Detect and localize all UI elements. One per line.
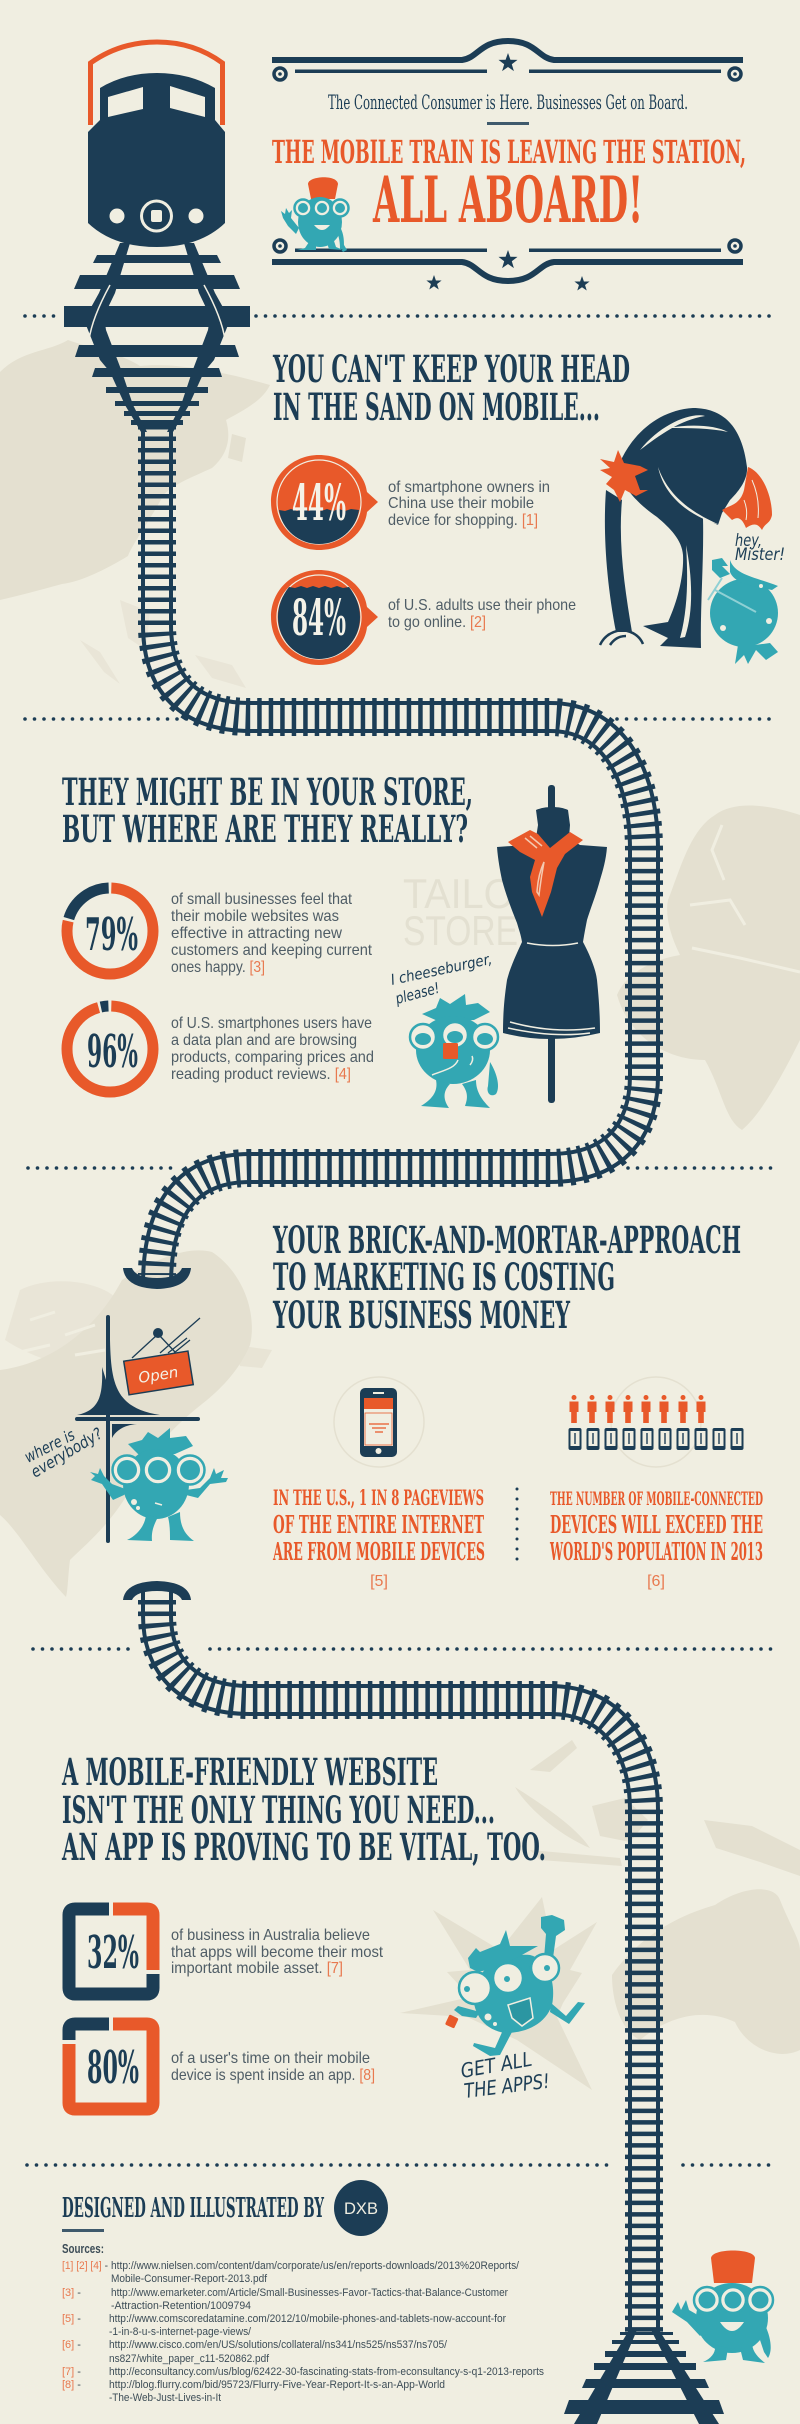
reference: 6: [6] (647, 1573, 665, 1590)
stat text: 96%: products, comparing prices and (171, 1049, 374, 1066)
stat text: 84% (388, 597, 576, 631)
speech note: where is everybody: where is (21, 1425, 78, 1467)
header frame: bottom (272, 240, 743, 290)
sources list: http://www.nielsen.com/content/dam/corporate/us/en/reports-downloads/2013%20Reports/ (111, 2260, 520, 2272)
stat text: 79%: ones happy. [3] (171, 959, 265, 976)
stat text: 44%: device for shopping. [1] (388, 512, 538, 529)
ostrich tail feathers (722, 467, 772, 530)
sources heading: Sources: (62, 2241, 104, 2256)
section three heading: YOUR BUSINESS MONEY (272, 1293, 570, 1337)
callout: connected devices (550, 1488, 763, 1566)
sources list: [8] - (62, 2379, 81, 2391)
logo: DXB (334, 2180, 388, 2236)
callout: get all the apps: THE APPS! (463, 2069, 551, 2103)
ostrich body and leg (622, 408, 747, 648)
world map: asia (0, 340, 270, 688)
stat text: 79% (171, 891, 373, 976)
square gauge: 32% (69, 1909, 153, 1994)
illustration: street crossing and open sign (75, 1315, 200, 1543)
dress form body (497, 807, 607, 1039)
stat text: 84%: to go online. [2] (388, 614, 486, 631)
mascot: conductor waving in header (281, 177, 348, 252)
section three heading (272, 1218, 741, 1337)
stat text: 44%: of smartphone owners in (388, 479, 550, 496)
ring chart: 96% (67, 1006, 153, 1092)
ring chart: 96%: 96% (87, 1025, 138, 1078)
railway track: perspective bottom (564, 2330, 724, 2424)
sources list: [7] - (62, 2366, 81, 2378)
stat text: 80%: of a user's time on their mobile (171, 2050, 370, 2067)
tunnel arc: track start (123, 1581, 191, 1600)
text: DESIGNED AND ILLUSTRATED BY (62, 2193, 324, 2224)
sources list: http://www.comscoredatamine.com/2012/10/mobile-phones-and-tablets-now-account-for (109, 2313, 506, 2325)
sources list: http://www.cisco.com/en/US/solutions/collateral/ns341/ns525/ns537/ns705/ (109, 2339, 448, 2351)
eight people (570, 1395, 706, 1423)
stat text: 32%: of business in Australia believe (171, 1927, 370, 1944)
world map: europe and africa (617, 806, 800, 1130)
speech note: hey Mister: hey, (735, 531, 762, 551)
sources list: http://blog.flurry.com/bid/95723/Flurry-Five-Year-Report-It-s-an-App-World (109, 2379, 445, 2391)
reference: 5: [5] (370, 1573, 388, 1590)
train roof (90, 42, 222, 125)
stat text: 79%: effective in attracting new (171, 925, 342, 942)
sources list: http://econsultancy.com/us/blog/62422-30-fascinating-stats-from-econsultancy-s-q1-2013-reports (109, 2366, 544, 2378)
speech note: hey Mister (735, 531, 785, 565)
icon group: people versus devices (568, 1377, 744, 1467)
faded shop lettering: STORE (403, 907, 518, 954)
dress form scarf highlights (525, 836, 544, 895)
faded shop lettering (403, 870, 543, 954)
ostrich collar feathers (600, 450, 648, 502)
dress form seams (508, 943, 595, 1035)
train body (88, 73, 225, 247)
sources list: -The-Web-Just-Lives-in-It (109, 2392, 221, 2404)
section two heading: BUT WHERE ARE THEY REALLY? (62, 807, 468, 851)
sources list: http://www.emarketer.com/Article/Small-Businesses-Favor-Tactics-that-Balance-Customer (111, 2287, 508, 2299)
section two heading: THEY MIGHT BE IN YOUR STORE, (62, 770, 473, 814)
stat badge: 84% (271, 570, 378, 665)
open sign (124, 1351, 193, 1395)
ring chart: 79% (67, 888, 153, 974)
stat text: 96%: of U.S. smartphones users have (171, 1015, 372, 1032)
square gauge: 80%: 80% (87, 2041, 139, 2094)
sources list: -1-in-8-u-s-internet-page-views/ (109, 2326, 252, 2338)
dress form scarf (508, 830, 583, 917)
mascot: upside-down with glasses (708, 558, 778, 664)
section two heading (62, 770, 473, 851)
callout: get all the apps (459, 2047, 551, 2103)
mascot: with phone and glasses (410, 994, 498, 1108)
ostrich neck (605, 490, 632, 632)
dotted vertical divider (516, 1489, 518, 1562)
stat badge: 44%: 44% (292, 473, 346, 532)
sources list: [6] - (62, 2339, 81, 2351)
square gauge: 80% (69, 2024, 153, 2109)
stat text: 96% (171, 1015, 374, 1083)
world map: southeast asia and australia (515, 1740, 800, 2054)
stat text: 84%: of U.S. adults use their phone (388, 597, 576, 614)
square gauge: 32%: 32% (87, 1926, 139, 1979)
ostrich claws (600, 630, 643, 645)
world map: north america (0, 1250, 272, 1597)
section one heading (272, 347, 630, 429)
speech note: hey Mister: Mister! (735, 545, 785, 565)
section four heading (61, 1750, 546, 1869)
speech note: cheeseburger: please! (393, 979, 442, 1008)
logo: DXB: DXB (344, 2199, 378, 2218)
speech note: cheeseburger: I cheeseburger, (389, 950, 494, 989)
starburst behind mascot (400, 1897, 597, 2090)
stat text: 79%: customers and keeping current (171, 942, 373, 959)
ostrich highlights (640, 415, 728, 638)
illustration: tailor dress form (497, 785, 607, 1103)
railway track: perspective top (64, 243, 250, 432)
dotted section dividers (25, 316, 776, 2165)
section four heading: A MOBILE-FRIENDLY WEBSITE (61, 1750, 438, 1794)
stat badge: 44% (271, 455, 378, 550)
callout: pageviews: OF THE ENTIRE INTERNET (273, 1510, 484, 1539)
header frame: top (272, 41, 743, 80)
railway track: lower winding section (157, 1590, 644, 2335)
sources list: Mobile-Consumer-Report-2013.pdf (111, 2273, 268, 2285)
sources list: -Attraction-Retention/1009794 (111, 2300, 251, 2312)
mascot: conductor at journey end (672, 2250, 773, 2363)
stat text: 32% (171, 1927, 384, 1977)
faded shop lettering: TAILOR (403, 870, 543, 917)
callout: pageviews: ARE FROM MOBILE DEVICES (272, 1537, 485, 1566)
train left window (108, 87, 143, 117)
railway track: upper winding section (157, 425, 644, 1285)
train lights (110, 200, 204, 232)
sources list (62, 2260, 544, 2404)
sources list: [3] - (62, 2287, 81, 2299)
sources list: ns827/white_paper_c11-520862.pdf (109, 2353, 270, 2365)
stat text: 96%: a data plan and are browsing (171, 1032, 357, 1049)
stat text: 32%: important mobile asset. [7] (171, 1960, 343, 1977)
stat text: 79%: their mobile websites was (171, 908, 339, 925)
stat text: 80% (171, 2050, 375, 2084)
tunnel arc: track end (123, 1268, 191, 1289)
header divider (487, 122, 529, 125)
ostrich tail highlights (744, 480, 758, 520)
stat badge: 84%: 84% (292, 588, 346, 647)
mascot: running with phone (445, 1915, 585, 2056)
open sign: Open (137, 1363, 180, 1387)
callout: pageviews: IN THE U.S., 1 IN 8 PAGEVIEWS (273, 1485, 484, 1510)
train right window (170, 86, 205, 117)
callout: pageviews (272, 1485, 485, 1566)
stat text: 79%: of small businesses feel that (171, 891, 352, 908)
stat text: 80%: device is spent inside an app. [8] (171, 2067, 375, 2084)
stat text: 44%: China use their mobile (388, 495, 534, 512)
stat text: 44% (388, 479, 550, 529)
credit divider (62, 2229, 104, 2232)
train locomotive (88, 42, 225, 247)
mascot: confused with three glasses (90, 1428, 228, 1541)
sources list: [5] - (62, 2313, 81, 2325)
callout: get all the apps: GET ALL (459, 2047, 534, 2083)
sources list: [1] [2] [4] - (62, 2260, 108, 2272)
stat text: 96%: reading product reviews. [4] (171, 1066, 351, 1083)
speech note: where is everybody: everybody? (27, 1424, 106, 1481)
stat text: 32%: that apps will become their most (171, 1944, 384, 1961)
ten devices (568, 1428, 744, 1450)
ring chart: 79%: 79% (85, 908, 138, 961)
illustration: ostrich (600, 408, 772, 648)
icon: smartphone (334, 1377, 424, 1467)
speech note: cheeseburger (389, 950, 494, 1008)
